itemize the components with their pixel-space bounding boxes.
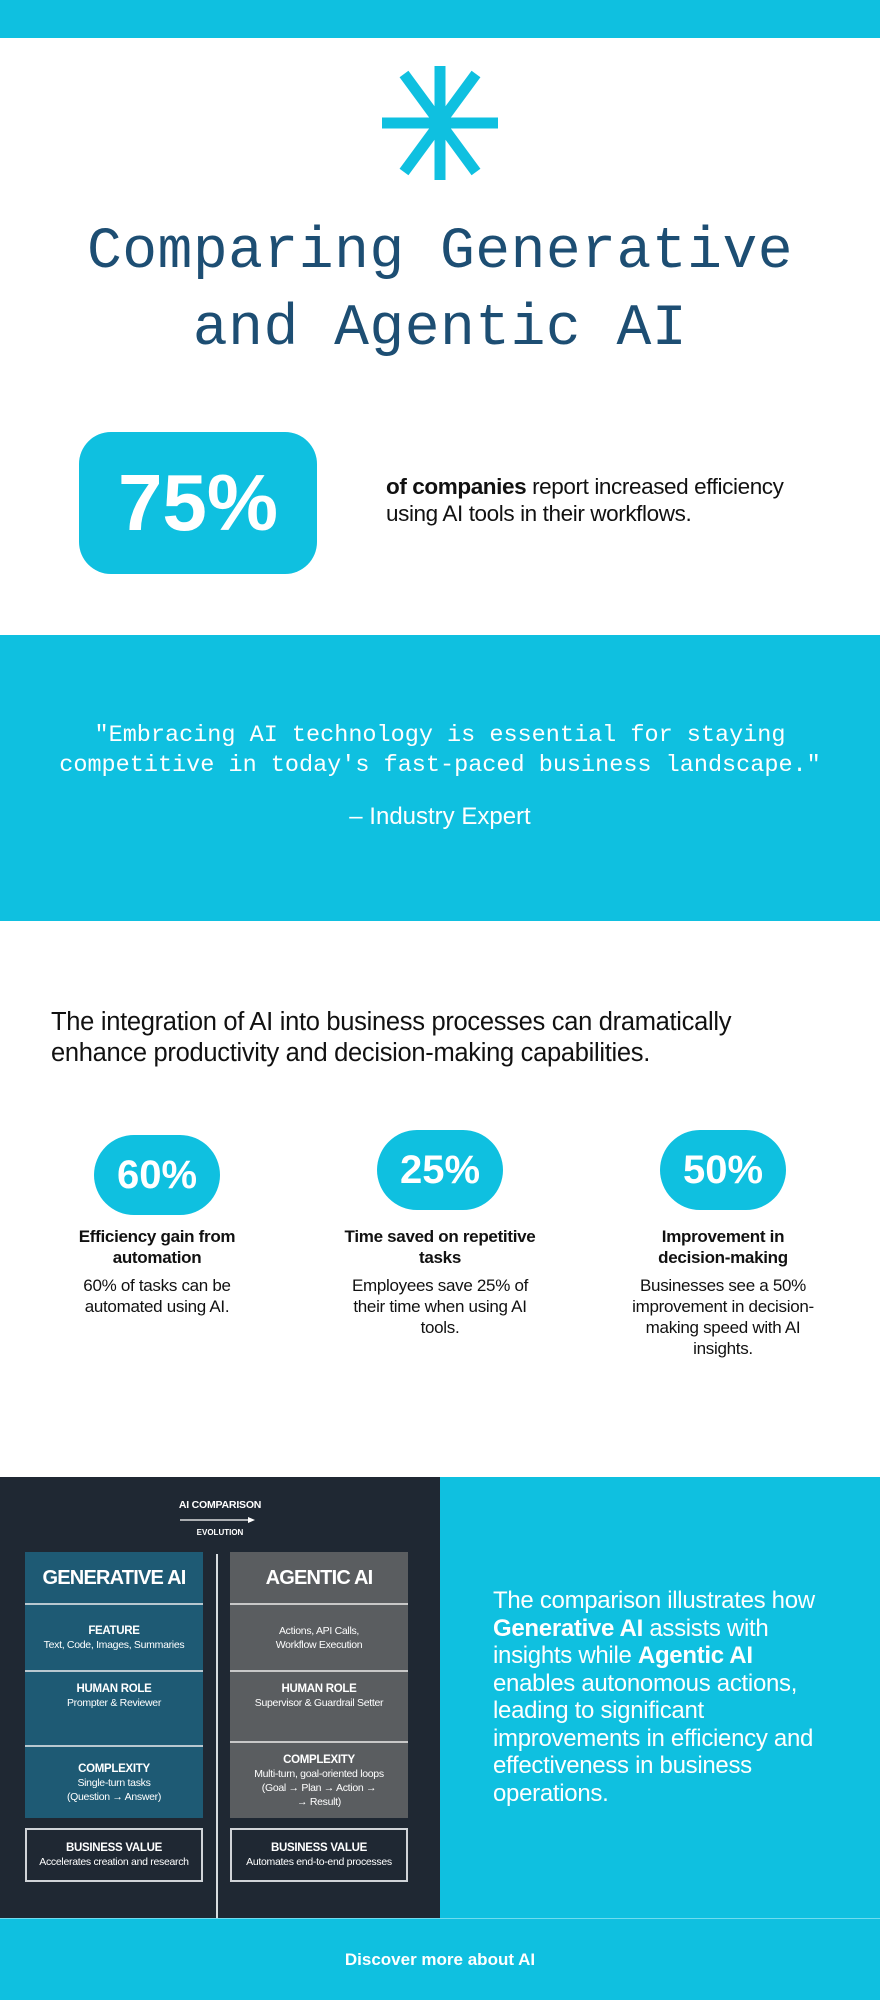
column: agentic AI: Supervisor & Guardrail Setter <box>255 1697 383 1709</box>
comparison section <box>0 1477 880 1918</box>
business value: agentic: Automates end-to-end processes <box>246 1856 392 1868</box>
stat: 50% <box>632 1130 814 1358</box>
column: generative AI: COMPLEXITY <box>78 1762 150 1774</box>
column: generative AI: Prompter & Reviewer <box>67 1697 161 1709</box>
column: generative AI: FEATURE <box>88 1625 140 1637</box>
quote text: competitive in today's fast-paced business landscape." <box>59 752 821 779</box>
comparison explanation: The comparison illustrates how Generative AI assists with insights while Agentic AI enables autonomous actions, leading to significant improvements in efficiency and effectiveness in business operations. <box>493 1587 815 1806</box>
business value: generative: Accelerates creation and research <box>39 1856 189 1868</box>
stat: 25%: Time saved on repetitive tasks <box>345 1227 535 1267</box>
quote text: "Embracing AI technology is essential for staying <box>94 722 786 749</box>
business value: generative <box>25 1828 203 1882</box>
title: Comparing Generative <box>87 220 793 285</box>
stat: 25%: Employees save 25% of their time when using AI tools. <box>352 1276 528 1337</box>
stat description: of companies report increased efficiency using AI tools in their workflows. <box>386 474 784 526</box>
stat callout 75%: 75% <box>118 458 278 547</box>
stat: 50%: Businesses see a 50% improvement in decision-making speed with AI insights. <box>632 1276 814 1358</box>
footer: Discover more about AI <box>345 1950 535 1968</box>
title <box>87 220 793 362</box>
column: agentic AI: Multi-turn, goal-oriented loops <box>254 1768 384 1780</box>
column: agentic AI: → Result) <box>297 1796 341 1808</box>
column: agentic AI: Workflow Execution <box>276 1639 362 1651</box>
intro paragraph: The integration of AI into business processes can dramatically enhance productivity and decision-making capabilities. <box>51 1008 731 1067</box>
stat callout 75% <box>79 432 317 574</box>
footer <box>0 1918 880 2000</box>
title: and Agentic AI <box>193 297 687 362</box>
column: generative AI: HUMAN ROLE <box>77 1683 151 1695</box>
stat: 25% <box>344 1130 536 1337</box>
divider line <box>216 1554 218 1918</box>
quote text <box>59 722 821 779</box>
column: agentic AI: Actions, API Calls, <box>279 1625 359 1637</box>
comparison chart image: EVOLUTION <box>197 1528 243 1537</box>
stat: 25%: 25% <box>400 1148 480 1192</box>
column: generative AI: Single-turn tasks <box>77 1776 151 1788</box>
column: generative AI: GENERATIVE AI <box>43 1566 185 1588</box>
icon: asterisk <box>382 66 498 180</box>
stat: 50%: 50% <box>683 1148 763 1192</box>
business value: agentic: BUSINESS VALUE <box>271 1842 367 1854</box>
stat: 60% <box>79 1135 235 1316</box>
arrow: evolution <box>180 1517 255 1523</box>
stat: 60%: 60% <box>117 1152 197 1196</box>
business value: generative: BUSINESS VALUE <box>66 1842 162 1854</box>
chart title: AI COMPARISON <box>179 1499 261 1511</box>
column: generative AI: Text, Code, Images, Summaries <box>44 1639 184 1651</box>
column: generative AI <box>25 1552 203 1818</box>
column: agentic AI <box>230 1552 408 1818</box>
top bar <box>0 0 880 38</box>
column: agentic AI: (Goal → Plan → Action → <box>262 1782 376 1794</box>
comparison chart image <box>0 1477 440 1918</box>
quote author: – Industry Expert <box>349 803 531 830</box>
quote band <box>0 635 880 921</box>
column: generative AI: (Question → Answer) <box>67 1790 161 1802</box>
stat: 60%: 60% of tasks can be automated using AI. <box>83 1276 231 1316</box>
column: agentic AI: COMPLEXITY <box>283 1754 355 1766</box>
business value: agentic <box>230 1828 408 1882</box>
column: agentic AI: HUMAN ROLE <box>282 1683 356 1695</box>
stat: 50%: Improvement in decision-making <box>658 1227 788 1267</box>
stat: 60%: Efficiency gain from automation <box>79 1227 235 1267</box>
column: agentic AI: AGENTIC AI <box>266 1566 372 1588</box>
